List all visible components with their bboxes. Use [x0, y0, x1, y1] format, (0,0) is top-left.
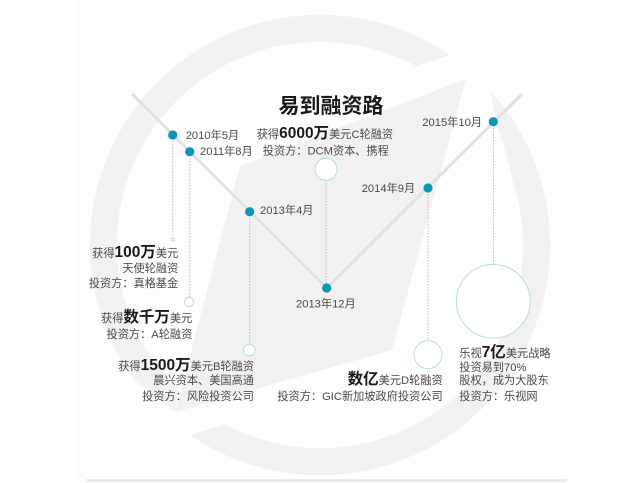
milestone: 2010 angel round: 投资方：真格基金	[89, 276, 178, 290]
background logo watermark	[90, 15, 550, 475]
milestone: 2013-04 B round: 投资方：风险投资公司	[142, 389, 254, 403]
milestone: 2011 A round: 投资方：A轮融资	[107, 327, 192, 341]
milestone: 2015-10 LeTV strategic investment: 投资方：乐视网	[459, 389, 538, 403]
milestone: 2015-10 LeTV strategic investment: 投资易到70%	[459, 360, 526, 374]
milestone: 2013-12 C round: 2013年12月	[296, 297, 356, 311]
milestone: 2011 A round: 2011年8月	[200, 144, 253, 158]
milestone: 2015-10 LeTV strategic investment: 股权，成为大股东	[459, 373, 549, 387]
milestone: 2013-04 B round: 2013年4月	[260, 203, 314, 217]
bottom rule	[86, 479, 567, 482]
milestone: 2014-09 D round	[277, 181, 443, 403]
background panel	[77, 0, 567, 480]
milestone: 2013-04 B round	[118, 203, 314, 403]
milestone: 2014-09 D round: 投资方：GIC新加坡政府投资公司	[277, 389, 443, 403]
milestone: 2013-12 C round: 获得6000万美元C轮融资	[257, 125, 393, 142]
timeline line	[132, 94, 522, 288]
milestone: 2015-10 LeTV strategic investment: 2015年10月	[422, 115, 482, 129]
milestone: 2011 A round: 获得数千万美元	[101, 308, 192, 326]
milestone: 2015-10 LeTV strategic investment	[422, 115, 551, 403]
milestone: 2013-04 B round: 晨兴资本、美国高通	[153, 373, 254, 387]
milestone: 2010 angel round	[89, 128, 239, 290]
milestone: 2010 angel round: 天使轮融资	[122, 261, 178, 275]
milestone: 2013-12 C round: 投资方：DCM资本、携程	[263, 144, 389, 158]
milestone: 2010 angel round: 2010年5月	[186, 128, 239, 142]
milestone: 2013-12 C round	[257, 125, 393, 311]
milestone: 2013-04 B round: 获得1500万美元B轮融资	[118, 357, 254, 374]
milestone: 2015-10 LeTV strategic investment: 乐视7亿美元战略	[459, 343, 551, 361]
milestone: 2014-09 D round: 数亿美元D轮融资	[348, 370, 443, 388]
milestone: 2011 A round	[101, 144, 253, 341]
milestone: 2014-09 D round: 2014年9月	[362, 181, 415, 195]
milestone: 2010 angel round: 获得100万美元	[92, 244, 178, 261]
title: 易到融资路	[278, 95, 384, 118]
